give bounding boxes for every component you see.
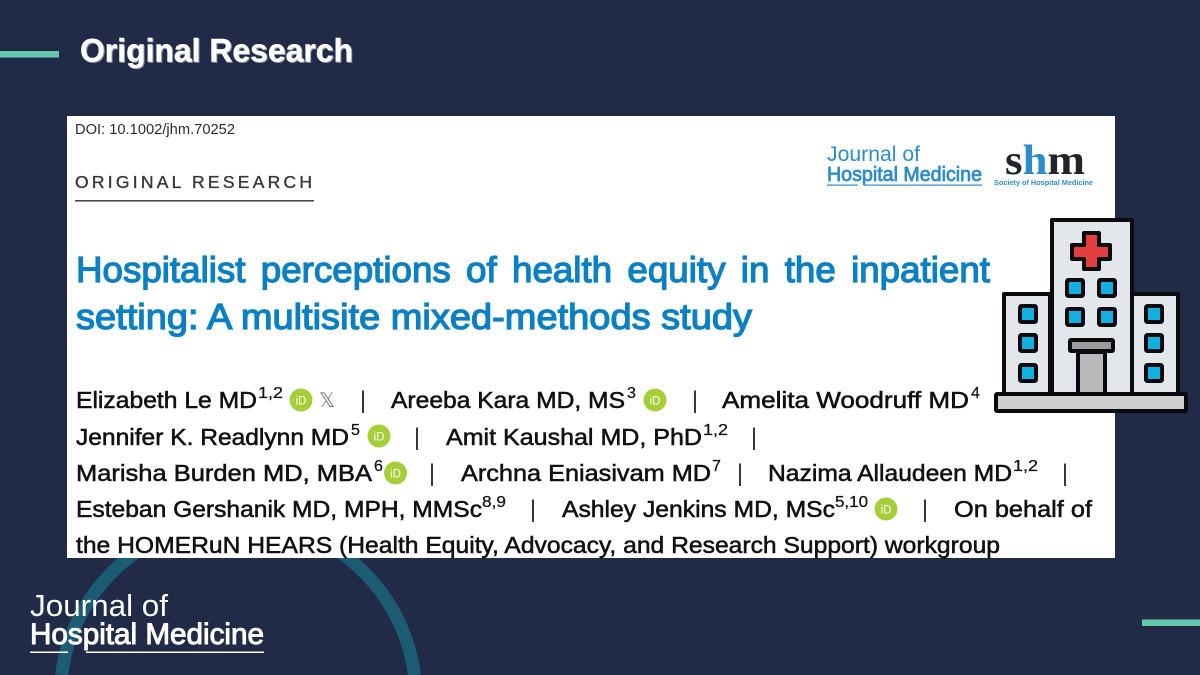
section label: original research: ORIGINAL RESEARCH	[75, 172, 312, 192]
author line 1: 4	[971, 385, 980, 402]
author line 1: Amelita Woodruff MD	[722, 387, 969, 413]
author line 3	[76, 458, 1068, 487]
DOI: DOI: 10.1002/jhm.70252	[75, 122, 235, 138]
author line 2: |	[414, 424, 420, 451]
author line 2: Jennifer K. Readlynn MD	[76, 424, 349, 450]
heading: Original Research: Original Research	[80, 32, 353, 68]
author line 1: |	[360, 387, 366, 414]
author line 1: Areeba Kara MD, MS	[391, 387, 625, 413]
author line 1: 𝕏	[319, 390, 335, 412]
author line 2: |	[751, 424, 757, 451]
author line 2: iD	[374, 432, 384, 444]
decorative teal ring	[62, 520, 414, 675]
accent bar: bottom right	[1142, 620, 1200, 626]
author line 3: |	[429, 460, 435, 487]
author line 1: Elizabeth Le MD	[76, 387, 257, 413]
central tower	[1052, 220, 1132, 394]
icon: hospital building	[996, 220, 1186, 411]
author line 3: 7	[712, 458, 721, 475]
door	[1078, 352, 1105, 394]
author line 4: 5,10	[835, 494, 868, 511]
panel: article card	[67, 116, 1115, 558]
author line 2	[76, 422, 757, 451]
author line 2: 5	[351, 422, 360, 439]
author line 3: 6	[374, 458, 383, 475]
author line 1: iD	[650, 396, 660, 408]
logo: Journal of Hospital Medicine (white)	[30, 588, 264, 653]
logo: Journal of Hospital Medicine (blue): Journal of	[827, 143, 920, 166]
logo: Society of Hospital Medicine: shm	[1005, 138, 1085, 184]
author line 3: Nazima Allaudeen MD	[768, 460, 1012, 486]
left wing	[1004, 294, 1050, 394]
author line 3: |	[737, 460, 743, 487]
author line 3: Marisha Burden MD, MBA	[76, 460, 372, 486]
logo: Journal of Hospital Medicine (blue): Hospital Medicine	[827, 163, 982, 186]
author line 2: Amit Kaushal MD, PhD	[446, 424, 702, 450]
author line 2: 1,2	[703, 422, 728, 439]
article title: setting: A multisite mixed-methods study	[76, 296, 752, 337]
author line 4: iD	[881, 504, 891, 516]
author line 3: |	[1062, 460, 1068, 487]
author line 4	[76, 494, 1092, 523]
author line 1	[76, 385, 980, 414]
article title: Hospitalist perceptions of health equity in the inpatient	[76, 249, 990, 290]
author line 4: |	[922, 496, 928, 523]
author line 3: 1,2	[1013, 458, 1038, 475]
door canopy	[1070, 340, 1113, 351]
logo: Journal of Hospital Medicine (white): Journal of	[30, 588, 168, 623]
red cross	[1072, 233, 1110, 269]
accent bar: top left	[0, 51, 59, 58]
right wing	[1132, 294, 1178, 394]
author line 1: 3	[627, 385, 636, 402]
ground base	[996, 394, 1186, 411]
tower windows	[1067, 280, 1115, 325]
author line 1: iD	[296, 396, 306, 408]
author line 3: iD	[390, 468, 401, 480]
author line 4: Esteban Gershanik MD, MPH, MMSc	[76, 496, 482, 522]
author line 3: Archna Eniasivam MD	[461, 460, 711, 486]
author line 1: |	[692, 387, 698, 414]
author line 4: Ashley Jenkins MD, MSc	[562, 496, 835, 522]
author line 5: the HOMERuN HEARS (Health Equity, Advocacy, and Research Support) workgroup	[76, 532, 1000, 558]
logo: Journal of Hospital Medicine (blue)	[827, 143, 982, 186]
logo: Journal of Hospital Medicine (white): Hospital Medicine	[30, 618, 264, 651]
author line 1: 1,2	[258, 385, 283, 402]
article title	[76, 249, 990, 337]
author line 4: On behalf of	[954, 496, 1092, 522]
right wing windows	[1146, 306, 1162, 381]
logo: Society of Hospital Medicine: Society of Hospital Medicine	[994, 178, 1093, 187]
author line 4: 8,9	[482, 494, 506, 511]
left wing windows	[1020, 306, 1036, 381]
author line 4: |	[530, 496, 536, 523]
